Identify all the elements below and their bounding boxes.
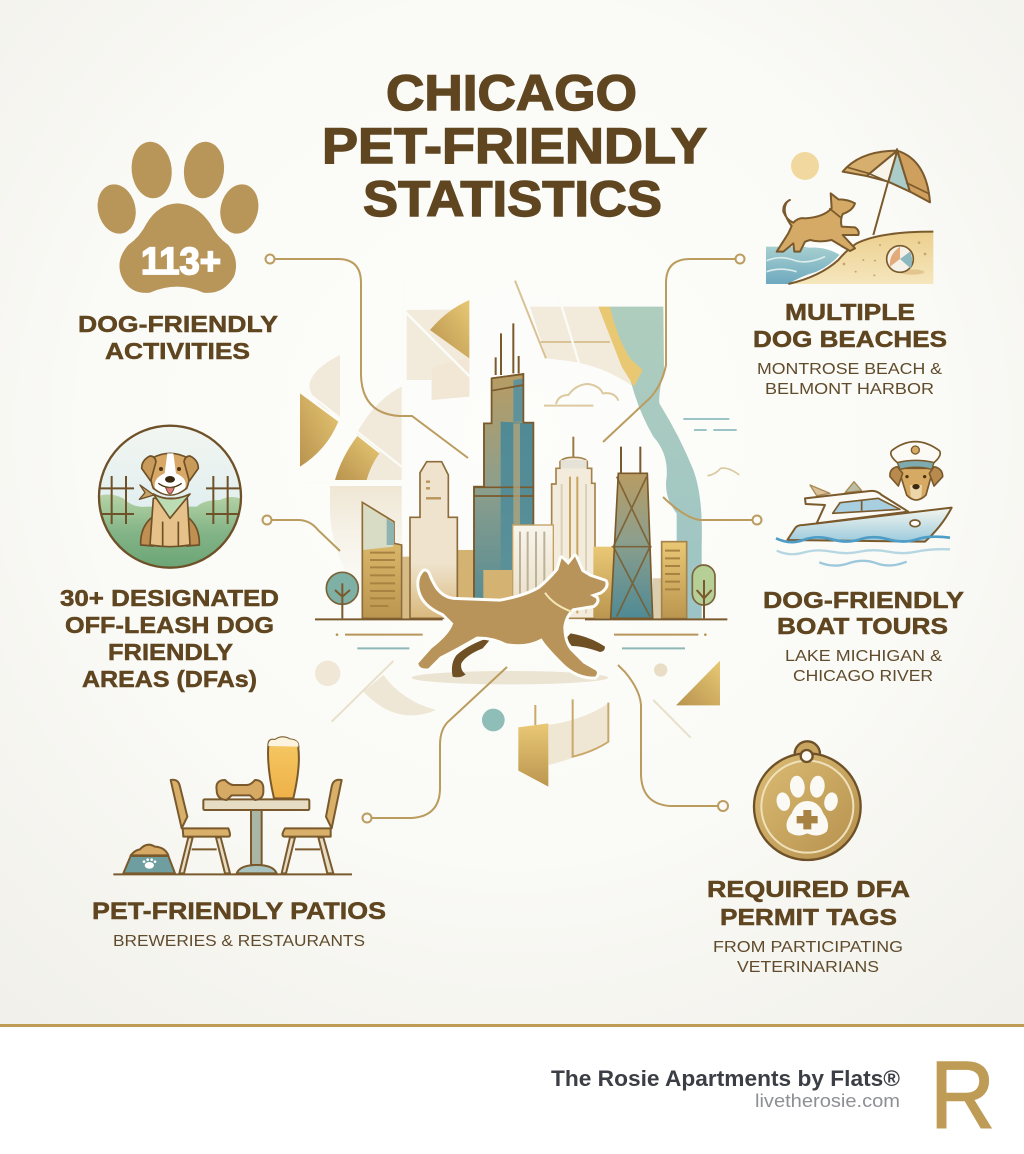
low background buildings — [403, 550, 663, 618]
website: livetherosie.com — [755, 1090, 900, 1111]
label: boat tours: DOG-FRIENDLY — [763, 587, 964, 613]
label: multiple dog beaches: DOG BEACHES — [753, 326, 947, 352]
label: patios: PET-FRIENDLY PATIOS — [92, 898, 386, 925]
connector: beaches — [603, 254, 744, 442]
label: multiple dog beaches: MULTIPLE — [785, 299, 915, 325]
panel: boat tours — [763, 442, 964, 685]
panel: dog-friendly activities — [78, 140, 278, 364]
bottom decorative shapes — [315, 661, 720, 787]
brand name: The Rosie Apartments by Flats® — [551, 1066, 900, 1091]
gold mid building — [593, 547, 620, 618]
sublabel: beach names — [757, 361, 942, 398]
Hancock tower — [611, 447, 653, 618]
ground lines and dashes — [315, 619, 727, 648]
sublabel: beach names: BELMONT HARBOR — [765, 381, 934, 398]
icon: paw with 113+ — [93, 140, 263, 293]
label: boat tours — [763, 587, 964, 639]
sublabel: veterinarians — [713, 939, 903, 976]
panel: pet-friendly patios — [92, 737, 386, 950]
label: off-leash areas — [60, 585, 279, 692]
icon: patio table with beer, bone, chairs, bowl — [113, 737, 352, 874]
panel: off-leash areas — [60, 426, 279, 692]
running dog — [418, 557, 606, 677]
trees — [326, 565, 715, 618]
label: permit tags: PERMIT TAGS — [720, 904, 897, 930]
sublabel: veterinarians: VETERINARIANS — [737, 959, 879, 976]
sublabel: boat tour waters: LAKE MICHIGAN & — [785, 648, 942, 665]
right small building — [662, 542, 687, 618]
sublabel: patios: BREWERIES & RESTAURANTS — [113, 933, 365, 950]
icon: dog on beach with umbrella — [766, 148, 933, 284]
label: off-leash areas: OFF-LEASH DOG — [65, 612, 274, 638]
connector: boat tours — [663, 497, 762, 524]
cream art-deco tower — [410, 462, 457, 618]
icon: paw with 113+: 113+ — [141, 240, 221, 283]
white deco tower — [552, 437, 595, 618]
shadow — [412, 671, 608, 684]
sublabel: beach names: MONTROSE BEACH & — [757, 361, 942, 378]
label: boat tours: BOAT TOURS — [777, 613, 948, 639]
map shapes, right with lake and river — [515, 281, 739, 618]
label: off-leash areas: 30+ DESIGNATED — [60, 585, 279, 611]
left gold building — [362, 502, 402, 618]
connector: activities — [266, 254, 468, 458]
logo R: R — [930, 1042, 995, 1149]
label: dog-friendly activities — [78, 311, 278, 364]
icon: dog in park circle — [97, 426, 247, 570]
title: CHICAGO — [386, 65, 637, 121]
title: STATISTICS — [363, 171, 662, 227]
title: PET-FRIENDLY — [322, 118, 707, 174]
sublabel: boat tour waters — [785, 648, 942, 685]
title — [322, 65, 707, 227]
connector: patios — [362, 667, 507, 822]
map shapes, left — [300, 280, 477, 613]
connector: off-leash areas — [262, 516, 340, 551]
label: dog-friendly activities: DOG-FRIENDLY — [78, 311, 278, 337]
connector: permit tags — [618, 665, 728, 811]
label: permit tags — [707, 876, 910, 930]
label: off-leash areas: AREAS (DFAs) — [82, 666, 257, 692]
panel: multiple dog beaches — [753, 148, 947, 398]
icon: medal tag with paw and cross — [754, 741, 861, 860]
sublabel: veterinarians: FROM PARTICIPATING — [713, 939, 903, 956]
low white building — [513, 525, 553, 618]
Willis Tower — [474, 323, 533, 618]
footer band — [0, 1024, 1024, 1154]
icon: boat with captain dog — [776, 442, 952, 566]
label: multiple dog beaches — [753, 299, 947, 352]
sublabel: boat tour waters: CHICAGO RIVER — [793, 668, 933, 685]
label: permit tags: REQUIRED DFA — [707, 876, 910, 902]
central illustration: Chicago skyline and map — [300, 280, 739, 787]
label: off-leash areas: FRIENDLY — [108, 639, 233, 665]
label: dog-friendly activities: ACTIVITIES — [105, 338, 250, 364]
panel: permit tags — [707, 741, 910, 976]
